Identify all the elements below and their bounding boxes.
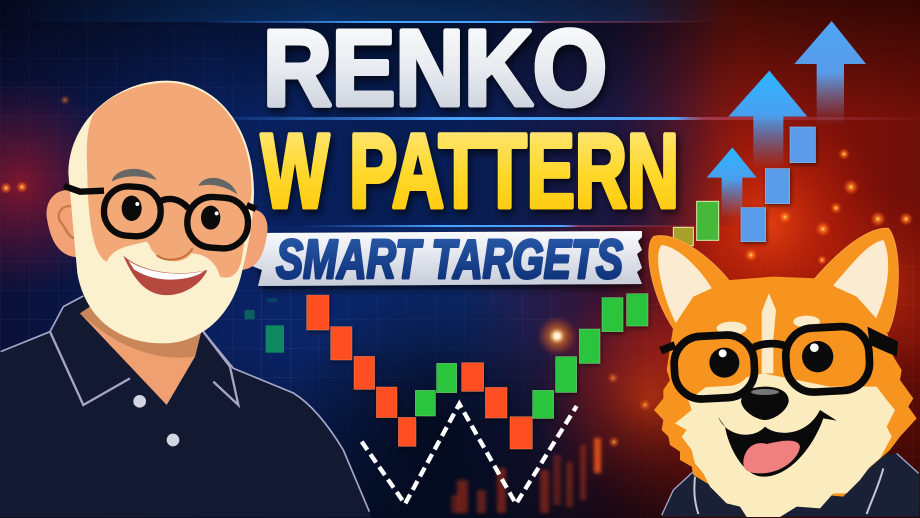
mouth xyxy=(718,410,837,477)
corgi mascot illustration xyxy=(649,228,917,517)
blue bricks xyxy=(741,127,815,242)
head and beard base xyxy=(68,81,254,343)
buttons xyxy=(133,395,146,408)
blaze xyxy=(762,293,776,373)
sparkle xyxy=(537,316,577,356)
right ear xyxy=(815,228,898,332)
red bricks xyxy=(307,295,532,449)
arrow large xyxy=(794,21,866,125)
subtitle strip xyxy=(252,228,642,290)
horizontal glow lines xyxy=(200,21,920,227)
brow spots xyxy=(717,322,747,335)
collar xyxy=(50,332,238,405)
neck xyxy=(80,300,203,405)
W dashed outline xyxy=(362,404,577,504)
presenter illustration xyxy=(0,81,372,517)
polo shirt xyxy=(0,296,372,517)
dog shirt xyxy=(662,453,919,517)
glow particles xyxy=(0,95,913,448)
orange fur xyxy=(654,277,917,497)
green bricks xyxy=(673,201,719,246)
tongue xyxy=(743,441,800,473)
teal bricks xyxy=(245,298,284,353)
title: RENKO: RENKO xyxy=(263,7,607,128)
ears xyxy=(47,190,78,257)
resistance dashed line xyxy=(328,294,627,308)
cream muzzle fur xyxy=(675,373,895,517)
arrow small xyxy=(707,147,757,218)
mouth xyxy=(123,256,207,295)
shirt outline xyxy=(1,296,369,512)
green bricks xyxy=(415,294,648,418)
nose xyxy=(741,387,789,420)
brush strip xyxy=(252,231,642,286)
subtitle text: SMART TARGETS xyxy=(276,228,623,290)
arrow medium xyxy=(728,71,807,168)
eyes xyxy=(709,348,739,378)
lens tint xyxy=(675,335,753,389)
glasses xyxy=(64,185,256,250)
upper trend bricks and arrows xyxy=(673,21,866,246)
title: W PATTERN: W PATTERN xyxy=(261,113,679,230)
eyebrows xyxy=(112,169,157,182)
left ear xyxy=(649,236,730,328)
eyes xyxy=(122,196,142,221)
nose xyxy=(149,230,194,261)
renko chart xyxy=(245,294,648,504)
bald skin xyxy=(87,83,252,278)
glasses temple xyxy=(867,327,898,357)
glasses xyxy=(661,325,871,400)
